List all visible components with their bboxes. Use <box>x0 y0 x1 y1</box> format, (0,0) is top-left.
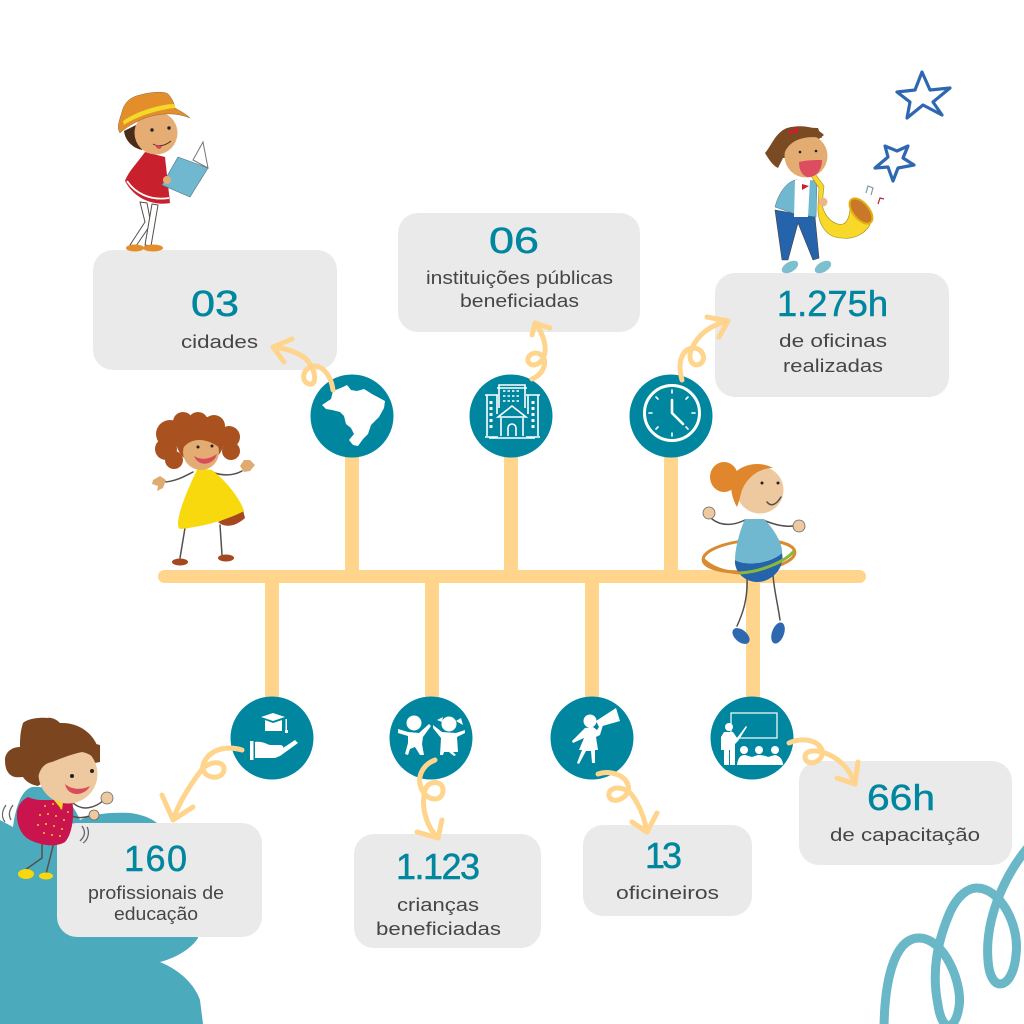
arrow: children to crianças <box>417 760 443 838</box>
card: 160 profissionais de educação: profissionais de <box>88 882 224 903</box>
character: girl with hat reading a book <box>118 92 208 252</box>
card: 03 cidades: 03 <box>191 283 239 324</box>
card: 13 oficineiros <box>583 825 752 916</box>
card: 160 profissionais de educação: 160 <box>124 838 187 879</box>
card: 1.275h de oficinas realizadas: 1.275h <box>777 283 888 324</box>
card: 13 oficineiros: 13 <box>645 835 682 876</box>
card: 13 oficineiros: oficineiros <box>616 882 719 903</box>
card: 160 profissionais de educação: educação <box>114 903 198 924</box>
decorative stars <box>875 72 950 181</box>
icon: public building <box>470 374 552 458</box>
character: girl with red dotted dress <box>2 718 113 880</box>
arrow: clock to oficinas <box>680 317 728 380</box>
character: girl playing saxophone <box>765 126 884 276</box>
character: curly-haired girl in yellow dress <box>152 412 255 566</box>
card: 66h de capacitação: 66h <box>867 777 935 818</box>
card: 1.123 crianças beneficiadas: beneficiadas <box>376 918 501 939</box>
timeline bars <box>158 450 866 703</box>
card: 06 instituições públicas beneficiadas: 06 <box>489 220 539 261</box>
card: 1.275h de oficinas realizadas <box>715 273 949 397</box>
icon: Brazil map <box>310 374 394 458</box>
icon: graduation cap in hand <box>230 696 314 780</box>
arrow: megaphone to oficineiros <box>598 773 657 832</box>
icon: person with megaphone <box>550 696 634 780</box>
arrow: cap to profissionais <box>162 748 242 820</box>
card: 06 instituições públicas beneficiadas: beneficiadas <box>460 290 579 311</box>
card: 06 instituições públicas beneficiadas <box>398 213 640 332</box>
decorative teal spiral, bottom right <box>884 845 1024 1024</box>
decorative teal blob, bottom left <box>0 787 203 1024</box>
arrow: Brazil to cidades <box>273 339 333 390</box>
arrow: building to instituições <box>528 323 550 379</box>
card: 1.123 crianças beneficiadas: crianças <box>397 894 479 915</box>
arrow: teacher to capacitação <box>789 740 858 784</box>
card: 1.123 crianças beneficiadas: 1.123 <box>396 846 480 887</box>
card: 03 cidades <box>93 250 337 370</box>
card: 1.275h de oficinas realizadas: de oficinas <box>779 330 887 351</box>
icon: two children <box>390 696 472 780</box>
card: 160 profissionais de educação <box>57 823 262 937</box>
icon: teacher and students <box>710 696 794 780</box>
card: 03 cidades: cidades <box>181 331 258 352</box>
character: girl with hula hoop <box>702 462 805 647</box>
card: 66h de capacitação: de capacitação <box>830 824 980 845</box>
card: 06 instituições públicas beneficiadas: instituições públicas <box>426 267 613 288</box>
icon: clock <box>630 374 712 458</box>
card: 1.123 crianças beneficiadas <box>354 834 541 948</box>
card: 1.275h de oficinas realizadas: realizadas <box>783 355 883 376</box>
card: 66h de capacitação <box>799 761 1012 865</box>
